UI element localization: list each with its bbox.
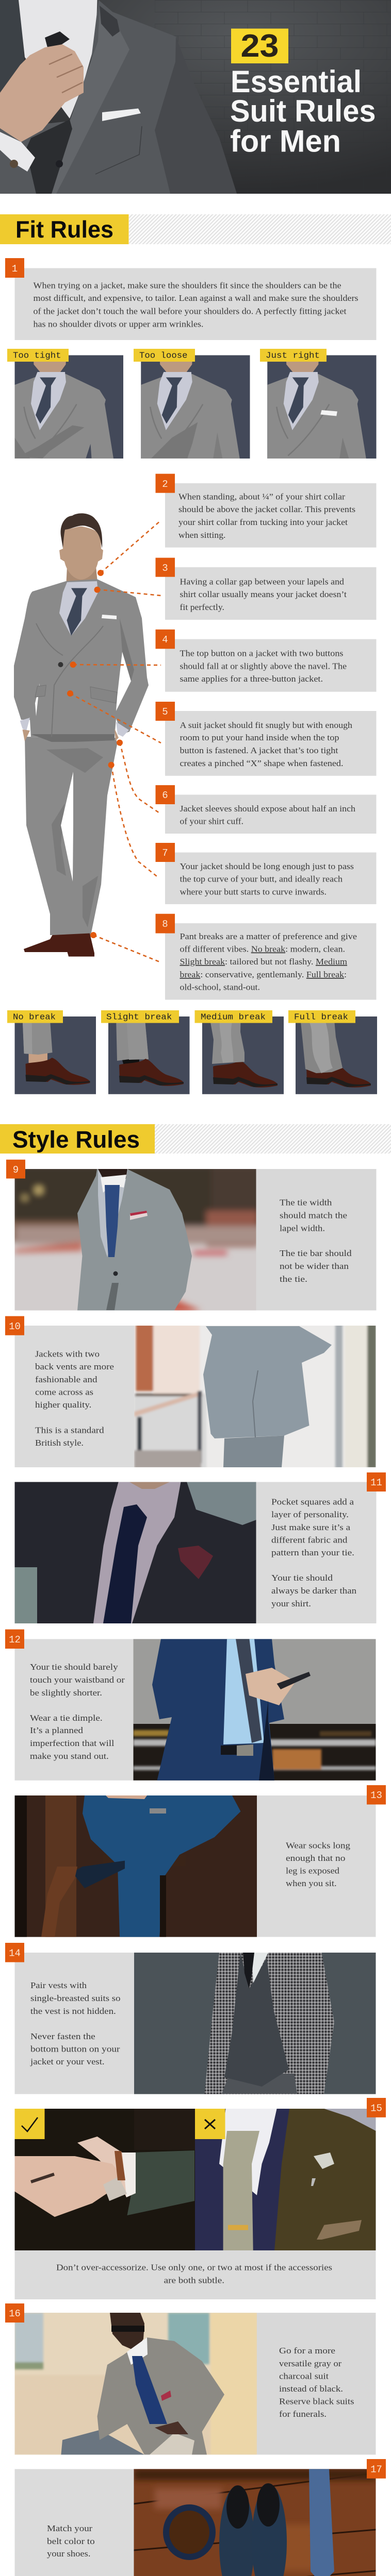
rule 7 number	[156, 843, 175, 862]
title: Suit Rules	[230, 94, 376, 128]
rule 8 number: 8	[162, 919, 168, 930]
illustration: man in suit	[14, 513, 149, 957]
rule 8 text: Slight break : tailored but not flashy. Medium	[180, 957, 347, 967]
tag: full break: Full break	[294, 1013, 348, 1023]
illustration: too tight	[7, 349, 124, 459]
rule 12 text: imperfection that will	[30, 1738, 115, 1748]
rule 11 text: Just make sure it’s a	[271, 1522, 351, 1532]
rule 5 text: A suit jacket should fit snugly but with enough	[180, 720, 353, 730]
rule 10 text: come across as	[35, 1387, 93, 1397]
hero photo	[0, 0, 391, 194]
photo: socks and shoes	[14, 1795, 257, 1937]
icon: cross	[195, 2109, 225, 2139]
tag: just right: Just right	[266, 351, 320, 361]
rule 8 text	[180, 931, 357, 992]
rule 17 text: belt color to	[47, 2536, 95, 2546]
rule 3 text: fit perfectly.	[180, 602, 224, 612]
rule 8 text: Pant breaks are a matter of preference and give	[180, 931, 357, 941]
badge: 23: 23	[240, 28, 279, 64]
rule 2 text: should be above the jacket collar. This prevents	[178, 504, 355, 514]
rule 13	[14, 1785, 386, 1937]
rule 4 text: The top button on a jacket with two buttons	[180, 648, 344, 658]
rule 16 text: Go for a more	[279, 2346, 335, 2355]
rule 9 text: the tie.	[280, 1274, 307, 1284]
rule 11 text: layer of personality.	[271, 1510, 349, 1519]
rule 5 text	[180, 720, 353, 768]
rule 10 number	[5, 1316, 24, 1335]
section heading: Style Rules	[0, 1124, 391, 1154]
rule 16 number: 16	[9, 2308, 21, 2319]
rule 10 number: 10	[9, 1321, 21, 1332]
rule 14 text: Pair vests with	[30, 1980, 87, 1990]
rule 14 text: jacket or your vest.	[30, 2057, 105, 2066]
title: for Men	[230, 124, 341, 159]
rule 13 text: Wear socks long	[286, 1840, 351, 1851]
rule 10 text	[35, 1349, 114, 1448]
rule 1 number	[5, 258, 24, 278]
rule 12 text	[30, 1662, 125, 1761]
tag: no break	[7, 1010, 63, 1023]
photo: three piece suit	[134, 1953, 376, 2094]
tag: slight break: Slight break	[106, 1013, 172, 1023]
rule 13 text: leg is exposed	[286, 1866, 340, 1876]
rule 4 number: 4	[162, 634, 168, 646]
rule 11	[14, 1472, 386, 1624]
icon: check	[14, 2109, 44, 2139]
rule 11 text: Pocket squares add a	[271, 1497, 354, 1506]
rule 8 number	[156, 914, 175, 934]
rule 9 number: 9	[13, 1164, 19, 1176]
rule 9 text: lapel width.	[280, 1223, 325, 1233]
illustration: too loose	[134, 349, 250, 459]
rule 15 text	[56, 2263, 332, 2285]
rule 4 text: should fall at or slightly above the navel. The	[180, 661, 347, 671]
rule 3 number: 3	[162, 563, 168, 574]
tag: medium break: Medium break	[201, 1013, 266, 1023]
rule 16 text: Reserve black suits	[279, 2397, 354, 2406]
rule 12 text: touch your waistband or	[30, 1675, 125, 1685]
rule 5	[156, 702, 377, 776]
rule 13 text: when you sit.	[286, 1878, 337, 1888]
illustration: just right	[260, 349, 377, 459]
rule 7 number: 7	[162, 848, 168, 859]
rule 3	[156, 558, 377, 620]
rule 1 number: 1	[12, 263, 18, 275]
section heading: Fit Rules	[0, 214, 391, 244]
rule 6 number	[156, 785, 175, 804]
rule 11 text: your shirt.	[271, 1599, 311, 1608]
rule 16 text	[279, 2346, 354, 2419]
rule 4	[156, 630, 377, 692]
rule 16 text: for funerals.	[279, 2409, 327, 2419]
rule 11 text: different fabric and	[271, 1535, 348, 1545]
rule 9 text: The tie bar should	[280, 1248, 352, 1258]
title	[230, 64, 376, 159]
rule 13 text: enough that no	[286, 1853, 346, 1863]
rule 15	[14, 2098, 386, 2299]
photo: belt, shoes and tie on wood	[134, 2469, 376, 2576]
rule 11 text	[271, 1497, 357, 1608]
callout lines and dots	[67, 520, 161, 962]
rule 9	[6, 1160, 377, 1314]
photo: man in plaid suit	[14, 1169, 256, 1311]
rule 10 text: fashionable and	[35, 1375, 97, 1384]
tag: too tight: Too tight	[13, 351, 61, 361]
rule 2 text: When standing, about ¼” of your shirt collar	[178, 492, 345, 501]
rule 11 text: Your tie should	[271, 1573, 333, 1583]
tag: no break: No break	[13, 1013, 56, 1023]
rule 12 text: make you stand out.	[30, 1751, 109, 1761]
rule 1	[5, 258, 377, 340]
title: Essential	[231, 64, 362, 99]
illustration: medium break	[195, 1010, 284, 1094]
rule 8	[156, 914, 377, 999]
rule 17 text: your shoes.	[47, 2549, 91, 2558]
tag: too tight	[7, 349, 69, 362]
rule 4 text: same applies for a three-button jacket.	[180, 674, 323, 684]
rule 7 text: the top curve of your butt, and ideally reach	[180, 874, 343, 884]
rule 14 text: Never fasten the	[30, 2031, 95, 2041]
rule 14	[5, 1943, 376, 2094]
rule 14 text: single-breasted suits so	[30, 1993, 121, 2003]
rule 2	[156, 474, 377, 548]
rule 5 text: room to put your hand inside when the top	[180, 733, 339, 742]
photo: jacket back vents	[134, 1326, 376, 1467]
rule 5 text: button is fastened. A jacket that’s too tight	[180, 745, 338, 755]
rule 3 text: shirt collar usually means your jacket doesn’t	[180, 589, 347, 599]
rule 15 text: Don’t over-accessorize. Use only one, or two at most if the accessories	[56, 2263, 332, 2273]
rule 16 text: charcoal suit	[279, 2371, 329, 2381]
badge: 23	[231, 28, 288, 64]
rule 14 text	[30, 1980, 120, 2066]
rule 5 number: 5	[162, 706, 168, 718]
rule 13 text	[286, 1840, 351, 1888]
rule 4 number	[156, 630, 175, 649]
rule 2 number: 2	[162, 479, 168, 490]
rule 2 number	[156, 474, 175, 493]
rule 1 text: of the jacket don’t touch the wall before your shoulders do. A perfectly fitting jacket	[33, 306, 347, 316]
photo: pocket square	[14, 1482, 256, 1623]
rule 8 text: break: conservative, gentlemanly. Full break:	[180, 970, 347, 979]
rule 12 number: 12	[9, 1634, 21, 1646]
tag: too loose	[134, 349, 195, 362]
photo: seated man in grey suit	[14, 2313, 257, 2454]
rule 3 text: Having a collar gap between your lapels and	[180, 577, 345, 587]
rule 2 text: your shirt collar from tucking into your jacket	[178, 517, 348, 527]
rule 13 number	[367, 1785, 386, 1804]
rule 17	[14, 2459, 386, 2576]
rule 6 number: 6	[162, 790, 168, 801]
rule 10 text: British style.	[35, 1438, 84, 1448]
illustration: full break	[288, 1010, 377, 1094]
rule 5 number	[156, 702, 175, 721]
rule 16	[5, 2303, 376, 2455]
rule 15 number: 15	[370, 2103, 382, 2114]
rule 3 number	[156, 558, 175, 577]
hero banner	[0, 0, 391, 194]
rule 3 text	[180, 577, 347, 612]
rule 8 text: old-school, stand-out.	[180, 982, 260, 992]
rule 2 text	[178, 492, 355, 540]
rule 14 text: the vest is not hidden.	[30, 2006, 116, 2016]
rule 6 text: of your shirt cuff.	[180, 816, 243, 826]
rule 9 text: not be wider than	[280, 1261, 349, 1271]
rule 11 text: always be darker than	[271, 1586, 357, 1596]
illustration: no break	[7, 1010, 96, 1094]
rule 17 text: Match your	[47, 2523, 92, 2533]
rule 14 number: 14	[9, 1947, 21, 1959]
rule 6 text	[180, 804, 356, 826]
rule 10 text: back vents are more	[35, 1362, 114, 1371]
rule 16 number	[5, 2303, 24, 2323]
rule 11 text: pattern than your tie.	[271, 1548, 354, 1557]
rule 15 text: are both subtle.	[164, 2275, 224, 2285]
rule 5 text: creates a pinched “X” shape when fastened.	[180, 758, 344, 768]
photo: bad example, too many accessories	[195, 2109, 376, 2250]
rule 9 text: The tie width	[280, 1198, 332, 1208]
rule 12 text: It’s a planned	[30, 1725, 84, 1735]
photo: navy suit with phone	[133, 1639, 376, 1781]
photo: good example, watch	[14, 2109, 195, 2250]
rule 17 number	[367, 2459, 386, 2479]
rule 7 text	[180, 861, 354, 896]
rule 11 number	[367, 1472, 386, 1492]
rule 12	[5, 1630, 376, 1781]
rule 12 text: Your tie should barely	[30, 1662, 118, 1672]
rule 9 text	[280, 1198, 352, 1284]
rule 10 text: higher quality.	[35, 1400, 91, 1410]
rule 14 number	[5, 1943, 24, 1962]
rule 9 text: should match the	[280, 1211, 347, 1220]
rule 7 text: Your jacket should be long enough just to pass	[180, 861, 354, 871]
rule 11 number: 11	[370, 1477, 382, 1488]
rule 17 text	[47, 2523, 95, 2558]
rule 1 text: When trying on a jacket, make sure the shoulders fit since the shoulders can be the	[33, 280, 341, 291]
illustration: slight break	[101, 1010, 190, 1094]
rule 1 text: has no shoulder divots or upper arm wrinkles.	[33, 319, 203, 329]
rule 1 text: most difficult, and expensive, to tailor. Lean against a wall and make sure the shoulders	[33, 293, 359, 303]
rule 15 number	[367, 2098, 386, 2117]
rule 14 text: bottom button on your	[30, 2044, 120, 2054]
rule 2 text: when sitting.	[178, 530, 226, 540]
rule 7	[156, 843, 377, 904]
rule 8 text: off different vibes. No break: modern, clean.	[180, 944, 345, 954]
rule 6 text: Jacket sleeves should expose about half an inch	[180, 804, 356, 814]
tag: just right	[260, 349, 327, 362]
rule 12 text: be slightly shorter.	[30, 1688, 102, 1698]
rule 6	[156, 785, 377, 834]
rule 12 number	[5, 1630, 24, 1649]
rule 10 text: This is a standard	[35, 1425, 104, 1435]
rule 9 number	[6, 1160, 25, 1179]
tag: slight break	[101, 1010, 179, 1023]
tag: full break	[288, 1010, 355, 1023]
rule 13 number: 13	[370, 1790, 382, 1801]
tag: too loose: Too loose	[139, 351, 188, 361]
rule 16 text: versatile gray or	[279, 2359, 341, 2368]
tag: medium break	[195, 1010, 272, 1023]
rule 7 text: where your butt starts to curve inwards.	[180, 887, 327, 896]
rule 10	[5, 1316, 377, 1468]
rule 10 text: Jackets with two	[35, 1349, 100, 1359]
rule 12 text: Wear a tie dimple.	[30, 1713, 103, 1723]
section heading: Fit Rules: Fit Rules	[15, 216, 113, 243]
rule 17 number: 17	[370, 2464, 382, 2475]
section heading: Style Rules: Style Rules	[12, 1126, 140, 1153]
rule 4 text	[180, 648, 347, 684]
rule 16 text: instead of black.	[279, 2384, 343, 2394]
rule 1 text	[33, 280, 359, 329]
